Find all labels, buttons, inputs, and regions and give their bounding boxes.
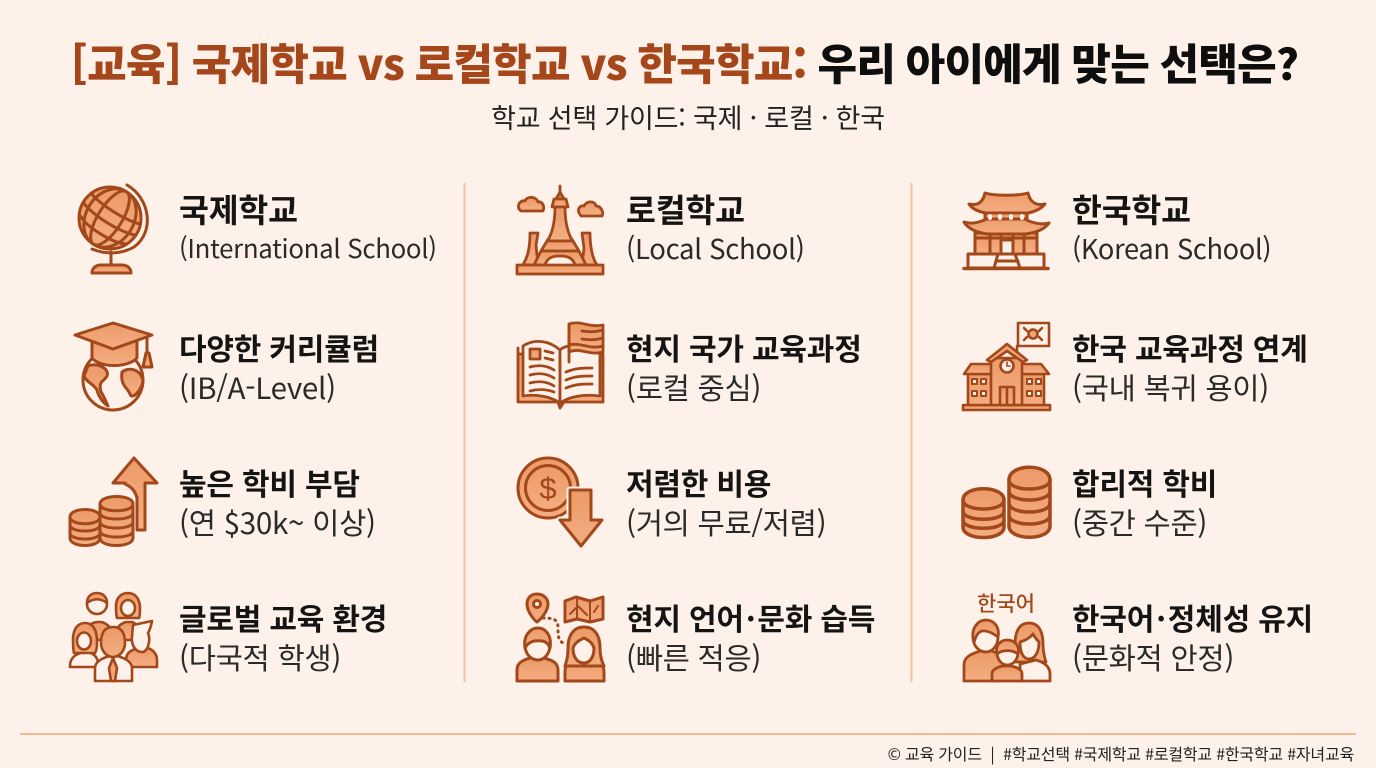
panel: international curriculum: 다양한 커리큘럼 [179,325,379,369]
icon: coins with up arrow [70,458,157,546]
panel: korean environment: (문화적 안정) [1072,635,1234,678]
panel: korean cost: 합리적 학비 [1072,460,1217,504]
icon: open book with flag [518,323,603,408]
panel: local school heading: (Local School) [626,227,805,267]
icon: family with korean label: 한국어 [977,588,1035,618]
panel: korean environment: 한국어·정체성 유지 [1072,595,1313,639]
footer credits: © 교육 가이드 | #학교선택 #국제학교 #로컬학교 #한국학교 #자녀교육 [888,741,1354,765]
panel: international environment [179,595,387,678]
panel: local curriculum: 현지 국가 교육과정 [626,325,862,369]
panel: local environment: 현지 언어·문화 습득 [626,595,875,639]
icon: dollar coin with down arrow [518,458,602,546]
panel: local environment: (빠른 적응) [626,635,761,678]
panel: local curriculum [626,325,862,408]
panel: international curriculum [179,325,379,408]
panel: local school heading [626,185,805,267]
subtitle: 학교 선택 가이드: 국제 · 로컬 · 한국 [491,97,885,136]
panel: korean curriculum: (국내 복귀 용이) [1072,365,1269,408]
title: [교육] 국제학교 vs 로컬학교 vs 한국학교: 우리 아이에게 맞는 선택은? [71,31,1298,93]
panel: local school heading: 로컬학교 [626,185,745,232]
icon: location, map and two people [517,594,604,681]
icon: korean palace [964,193,1049,268]
icon: school with korean flag [963,323,1050,410]
panel: local environment [626,595,875,678]
panel: korean school heading: 한국학교 [1072,185,1191,232]
icon: globe [67,175,153,273]
panel: international environment: (다국적 학생) [179,635,341,678]
panel: international curriculum: (IB/A-Level) [179,365,336,408]
panel: korean curriculum [1072,325,1308,408]
panel: local curriculum: (로컬 중심) [626,365,761,408]
icon: dollar coin with down arrow: $ [539,471,557,506]
panel: korean cost: (중간 수준) [1072,500,1207,543]
panel: korean school heading: (Korean School) [1072,227,1271,267]
panel: international school heading: (International School) [179,229,437,266]
icon: family with korean label [964,588,1050,681]
panel: international environment: 글로벌 교육 환경 [179,595,387,639]
icon: coin stacks [963,467,1050,538]
panel: international school heading: 국제학교 [179,185,298,232]
panel: korean curriculum: 한국 교육과정 연계 [1072,325,1308,369]
panel: korean cost [1072,460,1217,543]
panel: local cost: (거의 무료/저렴) [626,500,826,543]
panel: local cost [626,460,826,543]
panel: korean school heading [1072,185,1271,267]
icon: graduation cap and earth [75,323,152,410]
panel: international school heading [179,185,437,266]
panel: korean environment [1072,595,1313,678]
icon: eiffel tower and clouds [517,186,603,274]
panel: local cost: 저렴한 비용 [626,460,771,504]
panel: international cost [179,460,376,543]
panel: international cost: 높은 학비 부담 [179,460,360,504]
icon: diverse students [70,593,157,681]
panel: international cost: (연 $30k~ 이상) [179,500,376,543]
